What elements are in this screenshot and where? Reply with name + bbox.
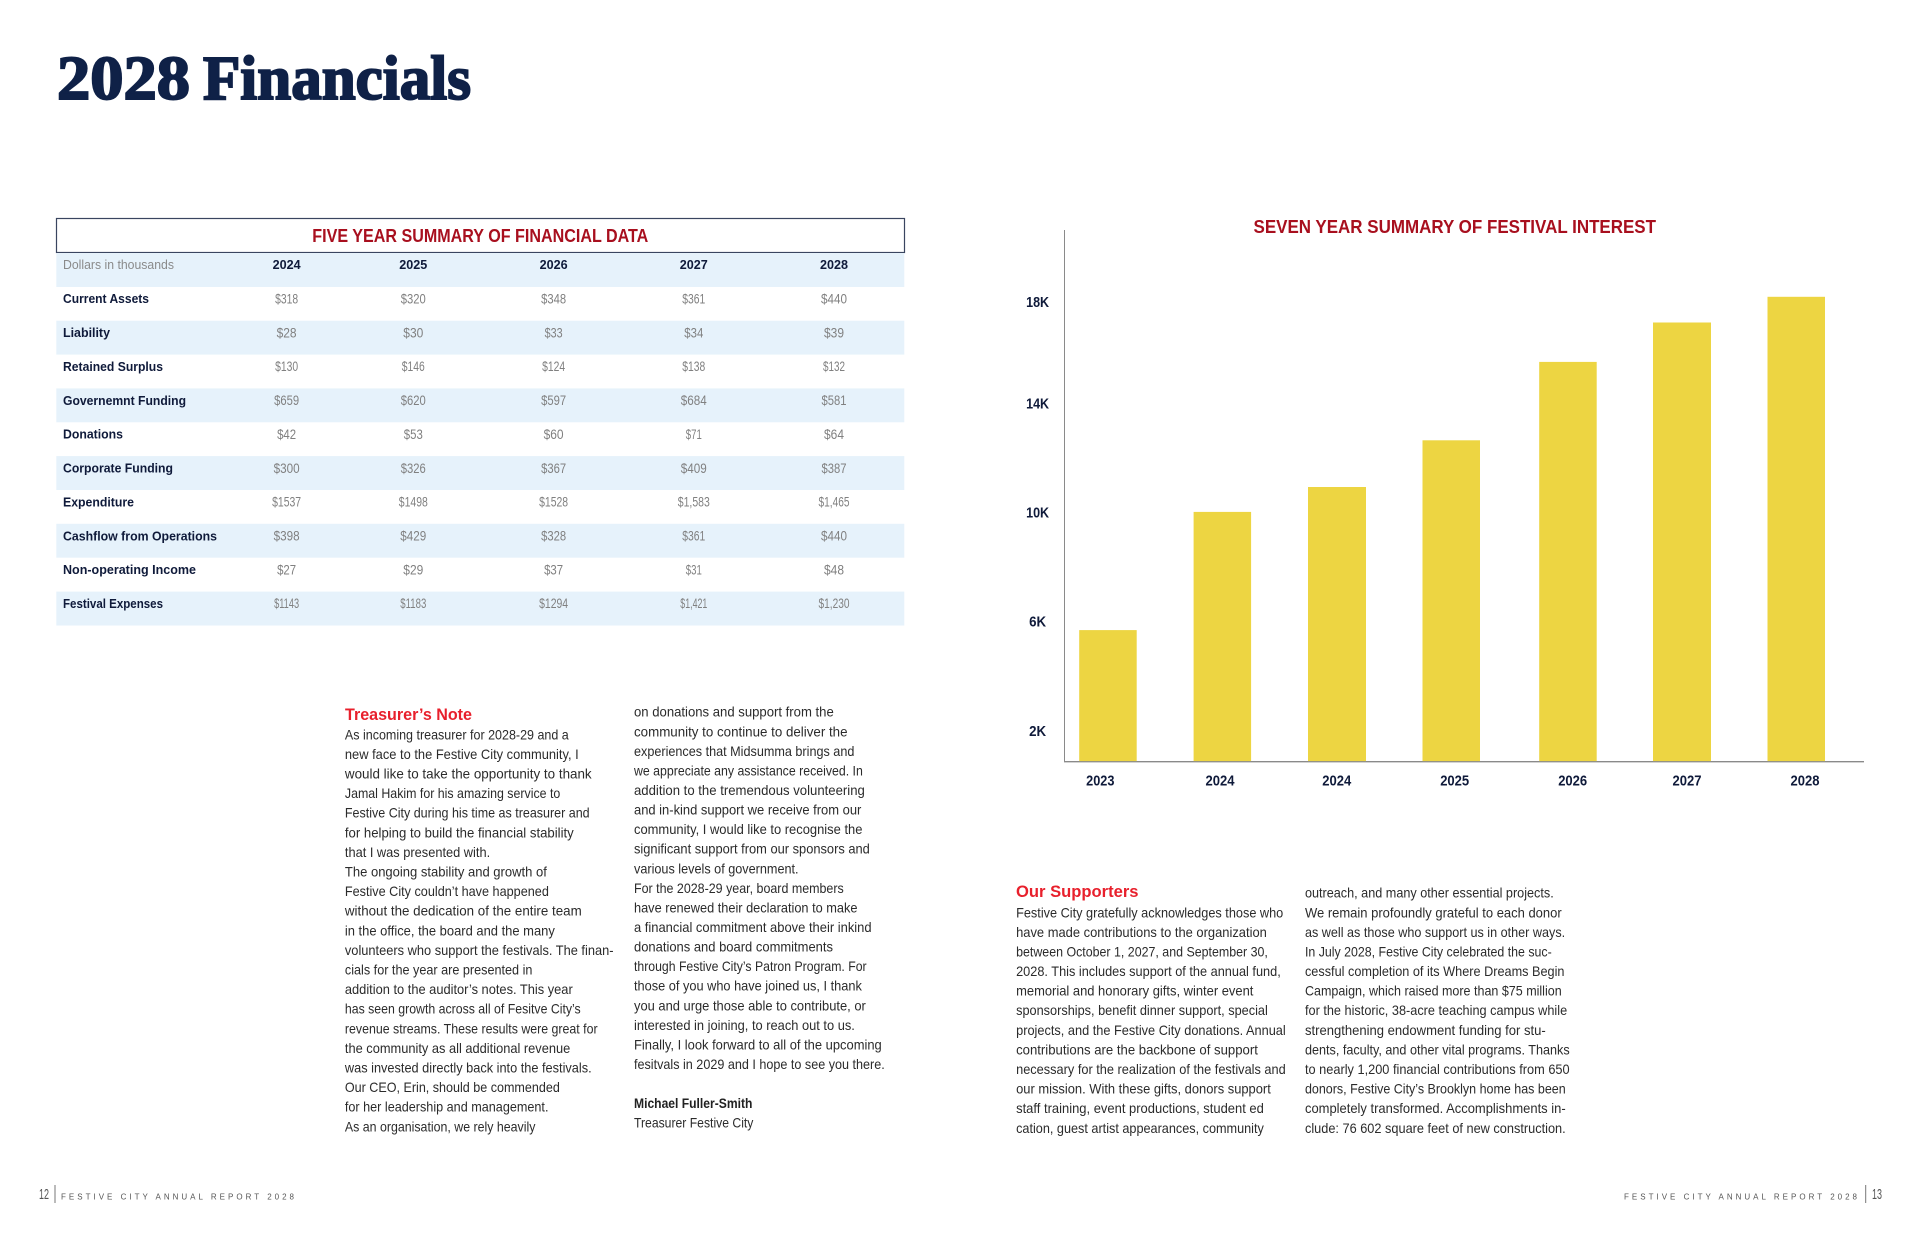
panel: seven year bar chart <box>1026 216 1864 790</box>
row: Governemnt Funding <box>56 388 904 422</box>
row: Expenditure: $1528 <box>539 495 568 510</box>
row: Non-operating Income: $37 <box>544 562 563 577</box>
text block: note column one: volunteers who support the festivals. The finan- <box>345 943 614 958</box>
row: Cashflow from Operations: $361 <box>682 528 705 544</box>
row: Cashflow from Operations <box>56 524 904 558</box>
row: Current Assets: $320 <box>401 291 426 306</box>
row: Expenditure: $1537 <box>272 495 301 510</box>
row: Governemnt Funding: $620 <box>401 393 426 408</box>
y axis labels: 14K <box>1026 397 1050 413</box>
table heading: FIVE YEAR SUMMARY OF FINANCIAL DATA <box>312 225 648 246</box>
signature <box>634 1096 754 1131</box>
row: Non-operating Income: Non-operating Income <box>63 563 196 577</box>
text block: note column two: Finally, I look forward to all of the upcoming <box>634 1037 882 1052</box>
chart heading: SEVEN YEAR SUMMARY OF FESTIVAL INTEREST <box>1254 216 1657 237</box>
row: Current Assets: $440 <box>821 291 847 306</box>
footer: left page <box>39 1185 295 1203</box>
text block: supporters column two: for the historic, 38-acre teaching campus while <box>1305 1003 1567 1018</box>
row: Donations: $53 <box>404 427 423 442</box>
row: Festival Expenses: Festival Expenses <box>63 597 163 611</box>
table header row: Dollars in thousands <box>63 257 174 272</box>
text block: note column two: have renewed their declaration to make <box>634 900 857 915</box>
y axis labels: 10K <box>1026 506 1050 522</box>
text block: note column one: Festive City couldn’t have happened <box>345 884 549 899</box>
row: Corporate Funding: Corporate Funding <box>63 462 173 476</box>
text block: supporters column two: Campaign, which raised more than $75 million <box>1305 984 1562 999</box>
text block: supporters column one: contributions are the backbone of support <box>1016 1042 1258 1057</box>
text block: note column one: As an organisation, we rely heavily <box>345 1119 536 1134</box>
signature: Treasurer Festive City <box>634 1116 754 1131</box>
text block: supporters column two: cessful completion of its Where Dreams Begin <box>1305 964 1564 979</box>
text block: supporters column two: completely transformed. Accomplishments in- <box>1305 1101 1566 1116</box>
table heading <box>56 218 904 252</box>
text block: supporters column two: as well as those who support us in other ways. <box>1305 925 1565 940</box>
row: Festival Expenses: $1,230 <box>818 596 850 611</box>
row: Expenditure <box>63 495 850 510</box>
text block: note column two: a financial commitment above their inkind <box>634 920 872 935</box>
text block: note column one: in the office, the board and the many <box>345 923 555 938</box>
row: Governemnt Funding: $659 <box>274 393 299 408</box>
text block: note column one: Jamal Hakim for his amazing service to <box>345 786 560 801</box>
footer: right page: FESTIVE CITY ANNUAL REPORT 2028 <box>1624 1192 1858 1201</box>
text block: supporters column one: have made contributions to the organization <box>1016 925 1267 940</box>
panel: our supporters <box>1016 882 1570 1136</box>
x axis labels: 2023 <box>1086 774 1114 790</box>
table header row: 2027 <box>680 258 708 272</box>
footer: left page: 12 <box>39 1187 49 1203</box>
text block: note column one: The ongoing stability and growth of <box>345 864 547 880</box>
row: Liability <box>56 321 904 355</box>
row: Current Assets: $348 <box>541 291 566 306</box>
text block: note column two: significant support from our sponsors and <box>634 842 870 857</box>
row: Donations: $60 <box>544 427 564 442</box>
text block: supporters column two: donors, Festive City’s Brooklyn home has been <box>1305 1082 1566 1097</box>
text block: note column two: and in-kind support we receive from our <box>634 803 862 818</box>
text block: note column two: you and urge those able to contribute, or <box>634 998 866 1013</box>
text block: note column one: Our CEO, Erin, should be commended <box>345 1080 560 1095</box>
row: Liability: $39 <box>824 325 844 340</box>
text block: note column one: revenue streams. These results were great for <box>345 1021 598 1036</box>
row: Expenditure: Expenditure <box>63 495 134 509</box>
row: Expenditure: $1,465 <box>818 495 850 510</box>
text block: supporters column two: dents, faculty, and other vital programs. Thanks <box>1305 1042 1570 1057</box>
row: Non-operating Income: $31 <box>686 562 702 577</box>
row: Cashflow from Operations: $440 <box>821 528 847 544</box>
row: Retained Surplus: $138 <box>682 359 705 374</box>
text block: supporters column two <box>1305 886 1570 1136</box>
table header row: 2026 <box>540 258 568 272</box>
row: Donations: Donations <box>63 428 123 442</box>
text block: note column one: that I was presented with. <box>345 845 490 860</box>
text block: supporters column one: cation, guest artist appearances, community <box>1016 1121 1264 1136</box>
row: Retained Surplus: Retained Surplus <box>63 360 163 374</box>
row: Festival Expenses <box>56 592 904 626</box>
row: Current Assets: $318 <box>275 291 298 306</box>
row: Current Assets <box>63 291 847 306</box>
text block: note column two: For the 2028-29 year, board members <box>634 881 844 896</box>
signature: Michael Fuller-Smith <box>634 1096 752 1111</box>
table header row: 2028 <box>820 258 848 272</box>
row: Liability: $30 <box>403 325 423 340</box>
y axis labels: 18K <box>1026 295 1050 311</box>
row: Festival Expenses: $1,421 <box>680 596 707 611</box>
bars <box>1079 297 1825 761</box>
text block: note column one: for helping to build the financial stability <box>345 825 574 840</box>
x axis labels: 2025 <box>1440 774 1469 790</box>
text block: note column one: new face to the Festive City community, I <box>345 747 579 762</box>
text block: note column one: Festive City during his time as treasurer and <box>345 806 590 821</box>
text block: note column two: various levels of government. <box>634 861 799 876</box>
x axis labels: 2027 <box>1672 774 1702 790</box>
table header row <box>56 253 904 287</box>
text block: supporters column two: strengthening endowment funding for stu- <box>1305 1023 1546 1038</box>
row: Expenditure: $1,583 <box>678 495 710 510</box>
y axis labels: 2K <box>1029 724 1047 740</box>
heading: Treasurer's Note: Treasurer’s Note <box>345 705 472 724</box>
text block: note column one: the community as all additional revenue <box>345 1041 570 1056</box>
row: Festival Expenses: $1143 <box>274 596 299 611</box>
text block: supporters column one: sponsorships, benefit dinner support, special <box>1016 1003 1268 1018</box>
text block: note column one: addition to the auditor’s notes. This year <box>345 982 573 997</box>
text block: note column two: fesitvals in 2029 and I hope to see you there. <box>634 1057 885 1072</box>
text block: supporters column one: our mission. With these gifts, donors support <box>1016 1082 1271 1097</box>
row: Retained Surplus: $130 <box>275 359 298 374</box>
text block: note column one: was invested directly back into the festivals. <box>344 1060 592 1076</box>
x axis labels: 2026 <box>1558 774 1587 790</box>
row: Festival Expenses: $1183 <box>400 596 426 611</box>
row: Festival Expenses: $1294 <box>539 596 568 611</box>
panel: treasurer's note <box>344 705 885 1134</box>
text block: supporters column one: projects, and the Festive City donations. Annual <box>1016 1023 1286 1038</box>
x axis labels <box>1086 774 1820 790</box>
heading: Our Supporters: Our Supporters <box>1016 882 1138 901</box>
row: Corporate Funding: $409 <box>681 461 707 476</box>
row: Retained Surplus: $132 <box>823 359 845 374</box>
x axis labels: 2028 <box>1790 774 1820 790</box>
text block: supporters column one <box>1016 905 1286 1136</box>
text block: note column one: cials for the year are presented in <box>345 962 532 978</box>
x axis labels: 2024 <box>1322 774 1351 790</box>
text block: note column two: addition to the tremendous volunteering <box>634 783 865 798</box>
text block: supporters column two: outreach, and many other essential projects. <box>1305 886 1554 901</box>
y axis labels: 6K <box>1029 615 1047 631</box>
row: Donations: $42 <box>277 427 296 442</box>
text block: supporters column one: staff training, event productions, student ed <box>1016 1101 1264 1116</box>
row: Cashflow from Operations: $398 <box>274 528 300 544</box>
row: Non-operating Income: $27 <box>277 562 296 577</box>
row: Donations: $64 <box>824 427 844 442</box>
row: Liability: Liability <box>63 326 110 340</box>
row: Cashflow from Operations: $429 <box>400 528 426 544</box>
y axis labels <box>1026 295 1050 740</box>
footer: right page <box>1624 1185 1882 1203</box>
table header row: 2024 <box>273 258 301 272</box>
row: Retained Surplus: $146 <box>402 359 425 374</box>
text block: note column two: experiences that Midsumma brings and <box>634 744 854 759</box>
text block: supporters column two: In July 2028, Festive City celebrated the suc- <box>1305 944 1552 960</box>
title: Financials <box>203 45 471 113</box>
text block: note column one: for her leadership and management. <box>345 1100 548 1115</box>
footer: left page: FESTIVE CITY ANNUAL REPORT 2028 <box>61 1192 295 1201</box>
row: Cashflow from Operations: $328 <box>541 528 566 544</box>
row: Retained Surplus <box>63 359 845 374</box>
row: Expenditure: $1498 <box>399 495 428 510</box>
row: Corporate Funding <box>56 456 904 490</box>
row: Liability: $34 <box>684 325 704 340</box>
text block: note column one: would like to take the opportunity to thank <box>344 766 592 782</box>
row: Non-operating Income: $29 <box>403 562 423 577</box>
text block: note column two: those of you who have joined us, I thank <box>634 979 862 994</box>
row: Corporate Funding: $387 <box>822 461 846 476</box>
panel: five year financial table <box>56 218 905 626</box>
text block: supporters column one: between October 1, 2027, and September 30, <box>1016 944 1268 960</box>
table header row: 2025 <box>399 258 427 272</box>
row: Governemnt Funding: $684 <box>681 393 707 408</box>
x axis labels: 2024 <box>1206 774 1234 790</box>
text block: note column two: donations and board commitments <box>634 940 833 955</box>
row: Corporate Funding: $326 <box>401 461 426 476</box>
title <box>57 45 471 113</box>
row: Corporate Funding: $300 <box>274 461 300 476</box>
text block: supporters column two: We remain profoundly grateful to each donor <box>1305 905 1562 920</box>
row: Retained Surplus: $124 <box>542 359 565 374</box>
text block: note column two: through Festive City’s Patron Program. For <box>634 959 867 974</box>
row: Cashflow from Operations: Cashflow from Operations <box>63 529 217 543</box>
title: 2028 <box>57 45 190 113</box>
row: Governemnt Funding: Governemnt Funding <box>63 394 186 408</box>
text block: supporters column one: 2028. This includes support of the annual fund, <box>1016 964 1281 979</box>
text block: supporters column one: necessary for the realization of the festivals and <box>1016 1062 1286 1077</box>
row: Current Assets: Current Assets <box>63 292 149 306</box>
text block: note column one: without the dedication of the entire team <box>344 904 582 919</box>
row: Liability: $28 <box>277 325 297 340</box>
text block: note column two: on donations and support from the <box>634 705 834 720</box>
chart axes <box>1064 230 1864 762</box>
row: Liability: $33 <box>545 325 563 340</box>
row: Governemnt Funding: $597 <box>541 393 566 408</box>
text block: note column two: we appreciate any assistance received. In <box>633 763 863 778</box>
row: Donations <box>63 427 844 442</box>
row: Donations: $71 <box>686 427 702 442</box>
row: Non-operating Income: $48 <box>824 562 844 577</box>
text block: note column one: As incoming treasurer for 2028-29 and a <box>345 727 569 742</box>
text block: note column two: community to continue to deliver the <box>634 724 848 739</box>
footer: right page: 13 <box>1872 1187 1882 1203</box>
text block: supporters column two: clude: 76 602 square feet of new construction. <box>1305 1121 1566 1136</box>
text block: note column one <box>344 727 614 1134</box>
text block: supporters column one: Festive City gratefully acknowledges those who <box>1016 905 1283 920</box>
row: Non-operating Income <box>63 562 844 577</box>
text block: note column two: interested in joining, to reach out to us. <box>634 1018 855 1033</box>
row: Corporate Funding: $367 <box>541 461 566 476</box>
text block: note column two <box>633 705 885 1072</box>
row: Governemnt Funding: $581 <box>822 393 846 408</box>
text block: note column two: community, I would like to recognise the <box>634 822 862 837</box>
text block: supporters column one: memorial and honorary gifts, winter event <box>1016 984 1254 999</box>
text block: supporters column two: to nearly 1,200 financial contributions from 650 <box>1305 1062 1570 1077</box>
row: Current Assets: $361 <box>682 291 705 306</box>
text block: note column one: has seen growth across all of Fesitve City’s <box>345 1002 581 1017</box>
